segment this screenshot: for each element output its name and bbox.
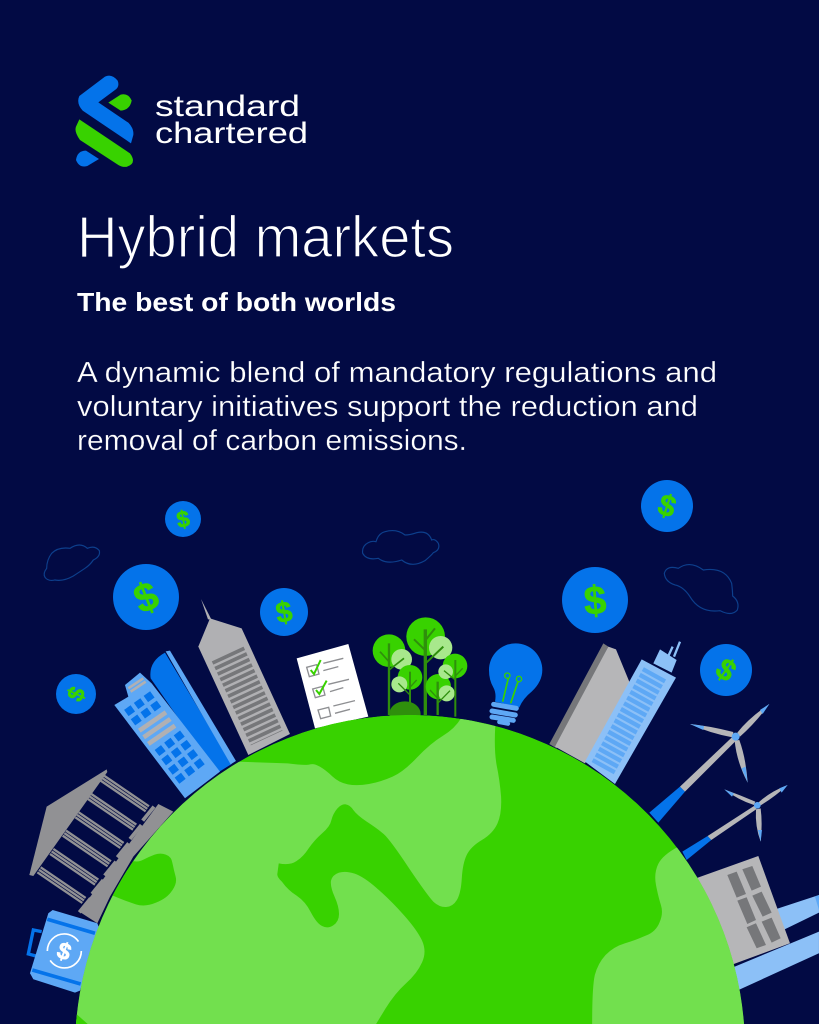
left skyline [28, 599, 290, 993]
pipes [727, 895, 819, 992]
eastern landmass [592, 847, 760, 1024]
body text [77, 357, 717, 457]
logo wordmark [155, 90, 308, 150]
hill [389, 701, 421, 727]
tree 3 [391, 665, 422, 703]
coin 5: $ [654, 488, 680, 525]
body text: removal of carbon emissions. [77, 425, 467, 457]
coin 2: $ [128, 573, 165, 622]
main landmass [60, 718, 501, 1024]
tree 2 [406, 617, 452, 715]
coins [56, 480, 752, 714]
coin 5 [641, 480, 693, 532]
logo wordmark: standard [155, 90, 300, 123]
coin 7 [700, 644, 752, 696]
coin 1 [165, 501, 201, 537]
coin 6: $ [582, 578, 608, 624]
wind turbine small [682, 785, 788, 860]
trees [373, 617, 467, 727]
checklist [297, 644, 368, 728]
grey building [549, 643, 630, 763]
light bulb [489, 643, 542, 724]
factory [687, 856, 790, 967]
checklist lines [323, 658, 355, 713]
suitcase with dollar exchange: $ [54, 937, 75, 966]
blue office building [114, 651, 236, 798]
western sea [112, 854, 176, 906]
logo: Standard Chartered [75, 76, 308, 167]
coin 1: $ [174, 505, 192, 533]
bank building [29, 769, 173, 923]
cloud: left [44, 545, 100, 580]
globe [60, 715, 760, 1024]
southwest sea [76, 1014, 88, 1024]
coin 6 [562, 567, 628, 633]
coin 2 [113, 564, 179, 630]
title: Hybrid markets [77, 205, 454, 270]
logo mark [75, 76, 133, 167]
coin 3 [260, 588, 308, 636]
wind turbine large [649, 704, 769, 823]
tree 4 [426, 674, 455, 715]
suitcase with dollar exchange [28, 910, 100, 993]
grey tower [198, 599, 290, 755]
coin 4 [56, 674, 96, 714]
right skyline [549, 642, 819, 992]
checklist boxes [307, 665, 331, 719]
coin 3: $ [273, 596, 295, 630]
subtitle: The best of both worlds [77, 287, 396, 317]
cloud: right [664, 565, 738, 613]
body text: voluntary initiatives support the reduction and [77, 391, 698, 423]
body text: A dynamic blend of mandatory regulations and [77, 357, 717, 389]
cloud: centre [363, 531, 439, 564]
tree 5 [438, 654, 467, 717]
coin 7: $ [709, 652, 742, 689]
tree 1 [373, 634, 412, 715]
light blue tower [585, 642, 680, 784]
coin 4: $ [62, 683, 91, 705]
logo wordmark: chartered [155, 117, 308, 150]
